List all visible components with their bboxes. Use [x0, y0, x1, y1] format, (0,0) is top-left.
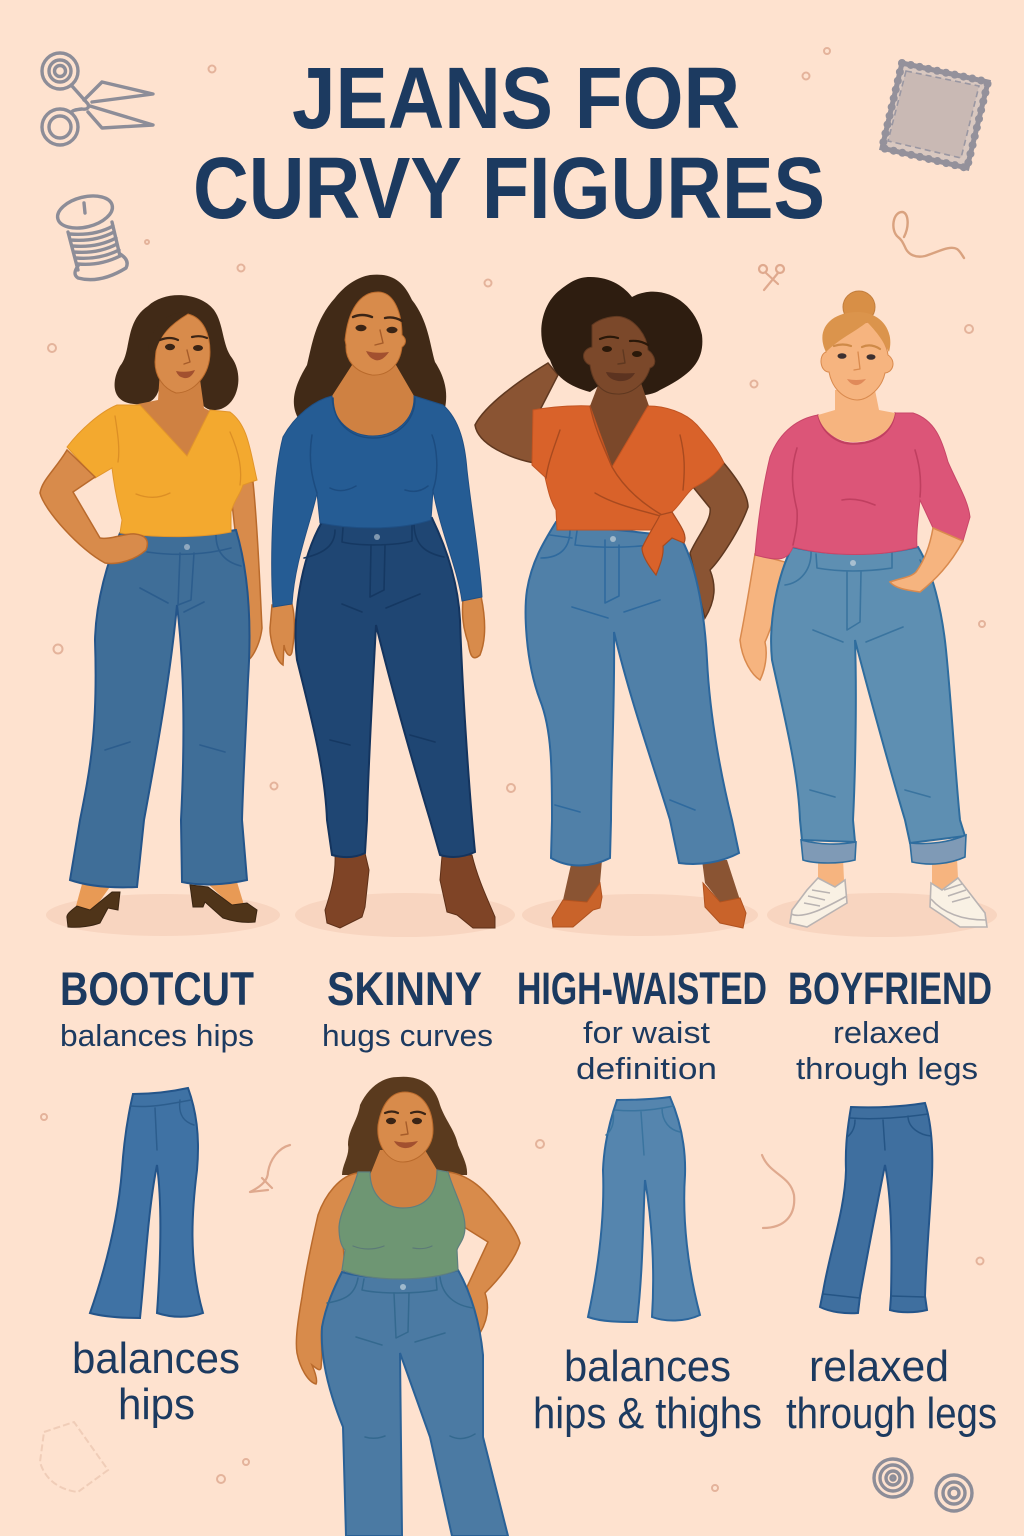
decorative thread center right [762, 1155, 794, 1228]
heeled shoes [67, 892, 120, 927]
title: CURVY FIGURES [193, 140, 825, 237]
jeans details [105, 535, 241, 752]
jeans details [785, 550, 930, 797]
neck [818, 390, 895, 442]
jeans details [304, 524, 444, 745]
label: high-waisted [517, 963, 767, 1086]
pink top [755, 413, 970, 559]
decorative thread top right [893, 212, 964, 258]
jeans icon: boyfriend [820, 1103, 932, 1313]
jeans icon: bootcut [90, 1088, 203, 1318]
brown boots [325, 853, 369, 928]
ground shadow [295, 893, 515, 937]
face [345, 292, 405, 375]
title: JEANS FOR [292, 50, 740, 147]
orange wrap top [532, 406, 724, 530]
rolled cuffs [801, 835, 966, 864]
text: balances hips and thighs: balances [564, 1342, 731, 1391]
figure: tank top model [296, 1077, 520, 1536]
figure: bootcut [40, 295, 280, 936]
jeans [771, 547, 965, 843]
icon: scissors [42, 53, 153, 145]
label: bootcut: balances hips [60, 1018, 254, 1053]
right arm [448, 1172, 520, 1333]
face and hair [821, 312, 893, 400]
label: bootcut [60, 962, 254, 1053]
text: relaxed through legs: relaxed [809, 1342, 949, 1391]
text: relaxed through legs: through legs [786, 1389, 997, 1438]
neck and chest [138, 365, 212, 458]
icon: fabric patch [882, 63, 988, 168]
jeans details [541, 530, 695, 812]
decorative thread center left [250, 1145, 290, 1192]
figure: high-waisted [475, 277, 758, 936]
figure: skinny [270, 275, 515, 937]
right arm [690, 462, 748, 618]
yellow tee [67, 405, 257, 537]
small scissors doodle [759, 265, 784, 290]
neck [332, 365, 414, 436]
green tank top [339, 1170, 465, 1279]
label: boyfriend: relaxed [833, 1015, 940, 1050]
hair [342, 1077, 467, 1175]
wrap tie knot [642, 512, 685, 575]
label: skinny: hugs curves [322, 1018, 493, 1053]
figure: boyfriend [740, 291, 997, 937]
jeans details [327, 1277, 475, 1439]
feet and orange shoes [552, 860, 746, 928]
neck [590, 380, 649, 468]
icon: buttons bottom right [874, 1459, 972, 1511]
dark jeans [296, 518, 475, 857]
icon: thread spool [54, 191, 127, 280]
text: balances hips: hips [118, 1380, 195, 1429]
label: high-waisted: HIGH-WAISTED [517, 963, 767, 1014]
hair bun [843, 291, 875, 323]
face [378, 1092, 433, 1162]
icon: faint patch bottom left [40, 1422, 108, 1492]
right arm [232, 482, 262, 660]
face [148, 312, 210, 393]
top details [310, 398, 437, 493]
blue long sleeve top [272, 396, 482, 607]
ankles [76, 882, 244, 912]
jeans [70, 530, 250, 887]
neck [370, 1150, 440, 1208]
ground shadow [522, 894, 758, 936]
text: balances hips: balances [72, 1334, 240, 1383]
label: skinny [322, 962, 493, 1053]
face [584, 316, 655, 394]
hand in pocket arm [890, 528, 963, 592]
ground shadow [767, 893, 997, 937]
text: balances hips [72, 1334, 240, 1429]
raised arm [475, 363, 558, 463]
label: bootcut: BOOTCUT [60, 962, 254, 1015]
white sneakers [790, 878, 987, 927]
label: high-waisted: for waist [583, 1015, 710, 1050]
afro hair [541, 277, 702, 395]
ground shadow [46, 894, 280, 936]
label: boyfriend [788, 963, 992, 1086]
text: balances hips and thighs: hips & thighs [533, 1389, 762, 1438]
left arm [740, 554, 785, 680]
text: balances hips and thighs [533, 1342, 762, 1438]
label: skinny: SKINNY [327, 962, 482, 1015]
left arm on hip [40, 450, 147, 563]
top details [792, 413, 921, 545]
ankles [818, 858, 958, 890]
jeans [526, 522, 739, 866]
label: boyfriend: through legs [796, 1051, 978, 1086]
title [193, 50, 825, 237]
jeans icon: flare [588, 1097, 700, 1322]
long hair [294, 275, 446, 418]
arms hands [270, 604, 294, 665]
jeans [322, 1270, 508, 1536]
tank details [353, 1246, 432, 1249]
hair [115, 295, 238, 410]
wrap top details [546, 406, 684, 516]
tee details [115, 416, 241, 497]
left arm [296, 1173, 358, 1384]
label: high-waisted: definition [576, 1051, 717, 1086]
text: relaxed through legs [786, 1342, 997, 1438]
